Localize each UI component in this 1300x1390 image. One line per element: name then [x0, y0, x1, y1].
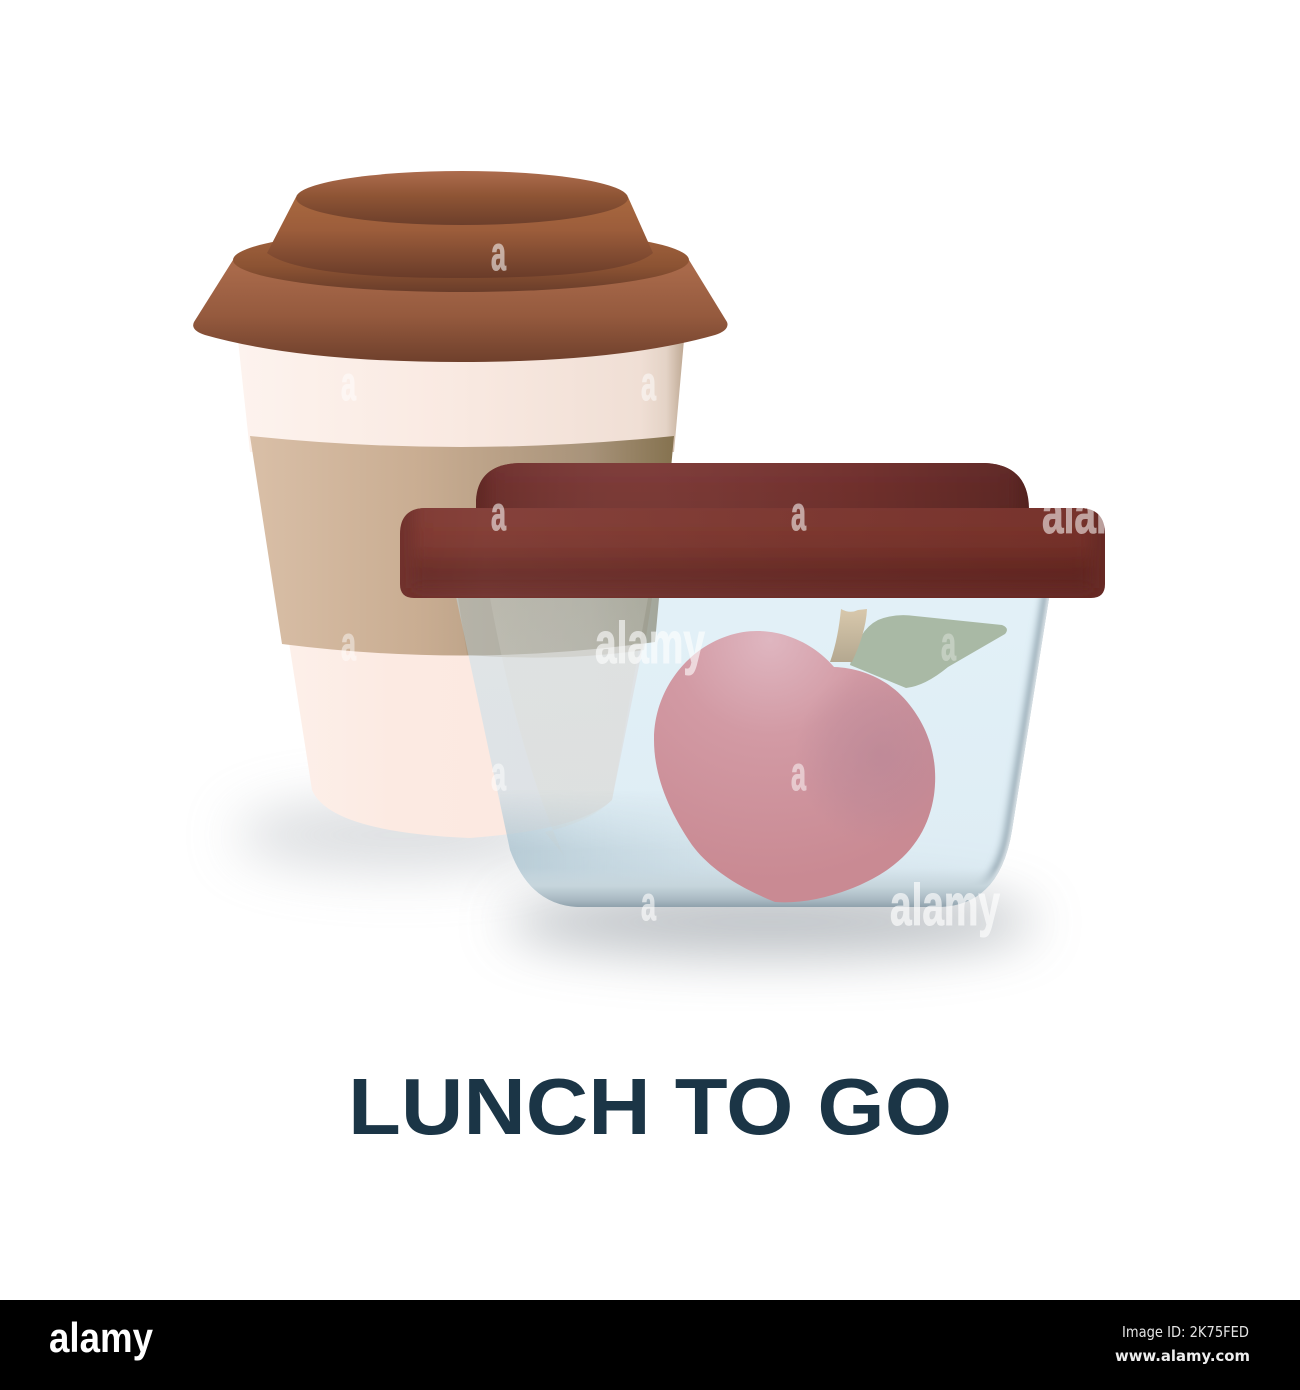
cup inner wall through box	[490, 598, 648, 856]
watermarks: a	[491, 488, 506, 541]
cup upper body	[238, 340, 684, 452]
watermarks: a	[641, 358, 656, 411]
icon: coffee cup	[193, 171, 728, 838]
website: www.alamy.com	[1115, 1347, 1250, 1365]
icon: lunch box with apple	[400, 452, 1105, 920]
watermarks: alamy	[595, 611, 705, 676]
sleeve tint through box	[458, 598, 652, 658]
watermarks: a	[491, 228, 506, 281]
watermarks: a	[941, 618, 956, 671]
footer bar	[0, 1300, 1300, 1390]
watermarks: a	[641, 878, 656, 931]
cup lid skirt	[193, 260, 728, 362]
watermarks: alamy	[890, 873, 1000, 938]
cup lid cap top	[296, 171, 628, 225]
box lid front	[400, 498, 1105, 598]
ground shadows	[235, 799, 1035, 956]
watermarks: alamy	[1042, 481, 1152, 546]
watermarks	[341, 228, 1152, 938]
watermarks: a	[341, 358, 356, 411]
watermarks: a	[791, 488, 806, 541]
apple shading	[827, 699, 932, 802]
box lid back	[476, 463, 1029, 508]
title: LUNCH TO GO	[348, 1062, 952, 1151]
cup lid cap	[267, 197, 653, 278]
cup sleeve	[250, 436, 674, 656]
footer logo: alamy	[49, 1314, 154, 1361]
watermarks: a	[341, 618, 356, 671]
box glass edge	[500, 592, 1050, 908]
cup lower body	[288, 636, 645, 838]
box lower tint	[500, 803, 716, 890]
apple leaf	[850, 615, 1007, 688]
watermarks: a	[491, 748, 506, 801]
watermarks: a	[791, 748, 806, 801]
box glass	[455, 592, 1050, 907]
cup lid ring	[233, 228, 689, 292]
image id: Image ID: 2K75FED	[1122, 1323, 1249, 1341]
apple stem	[830, 609, 867, 662]
apple	[654, 631, 936, 902]
